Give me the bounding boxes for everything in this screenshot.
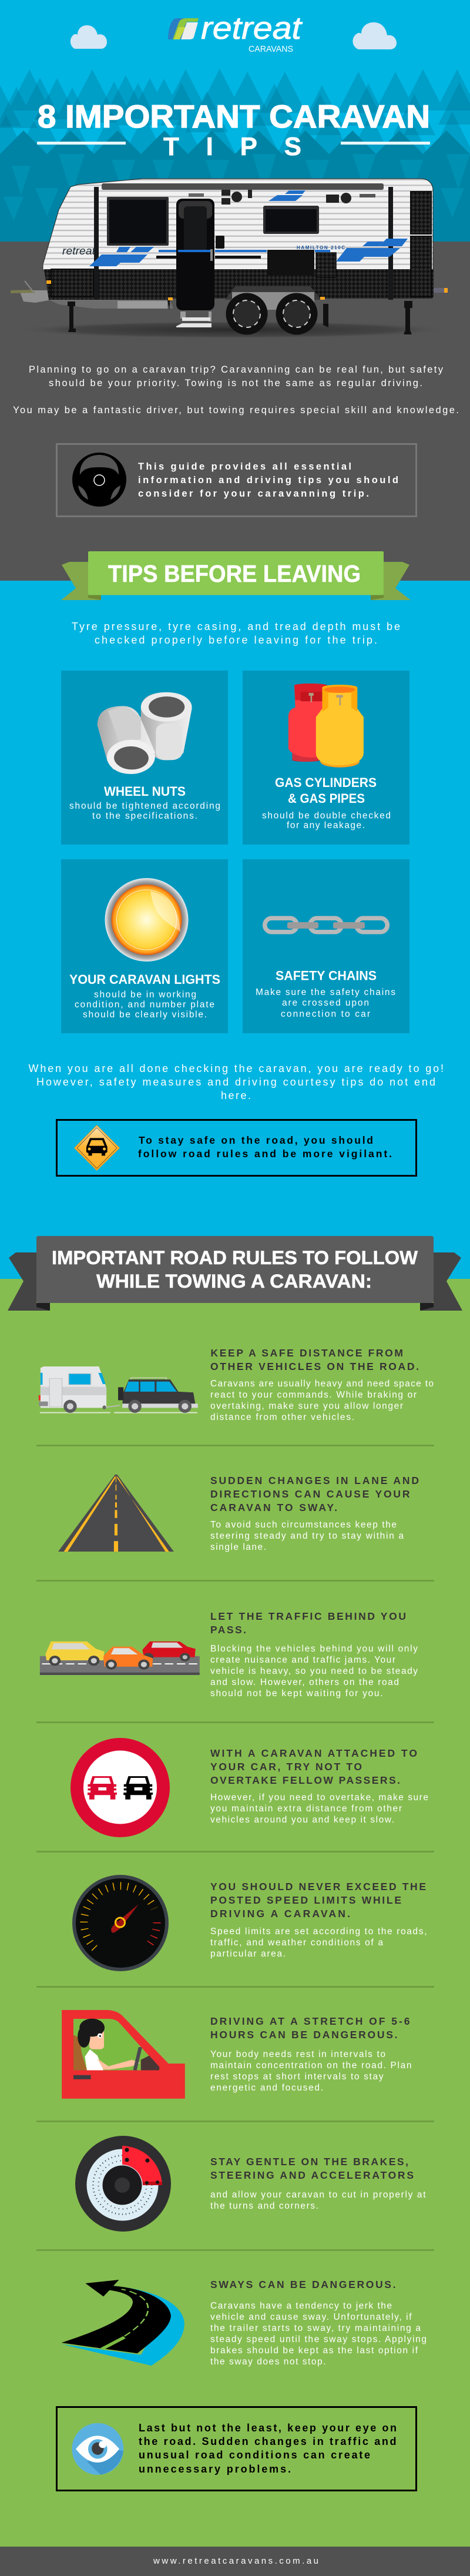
rule heading (210, 1881, 426, 1920)
icon: no overtaking sign (70, 1738, 170, 1837)
front locker (51, 269, 93, 297)
card text: should be in working (94, 990, 196, 1000)
icon: road (58, 1475, 174, 1552)
blue section background (0, 581, 470, 1279)
rule heading: DIRECTIONS CAN CAUSE YOUR (210, 1488, 410, 1500)
title (37, 98, 430, 161)
wheel arch (225, 286, 321, 300)
black trim stripes (156, 256, 261, 259)
ready to go text: here. (221, 1090, 251, 1101)
logo wordmark: retreat (201, 11, 303, 46)
rule heading (210, 1610, 406, 1636)
callout text: To stay safe on the road, you should (139, 1134, 373, 1146)
hatch large (267, 250, 314, 275)
rule 8: sways (62, 2279, 427, 2367)
rule heading (210, 1747, 417, 1786)
caravan lower panel (44, 269, 434, 310)
ready to go text (28, 1063, 444, 1101)
rule heading (210, 1347, 419, 1372)
heading text: WHILE TOWING A CARAVAN: (96, 1271, 372, 1292)
rule text: and allow your caravan to cut in properly at (210, 2190, 426, 2200)
card text: connection to car (281, 1009, 370, 1019)
footer background (0, 2547, 470, 2576)
heading text: TIPS BEFORE LEAVING (108, 560, 361, 587)
heading ribbon: tips before leaving (61, 551, 411, 600)
card title: & GAS PIPES (288, 791, 365, 806)
icon: eye (72, 2423, 123, 2475)
rule text (210, 2049, 411, 2093)
rule text (210, 1520, 404, 1552)
rule heading: OVERTAKE FELLOW PASSERS. (210, 1774, 400, 1786)
rule text: vehicle is heavy, so you need to be steady (210, 1666, 418, 1676)
rule heading: DRIVING AT A STRETCH OF 5-6 (210, 2015, 410, 2027)
step (176, 311, 212, 327)
callout text: consider for your caravanning trip. (138, 488, 369, 499)
rule 5: speed limits (72, 1875, 427, 1971)
rule heading: KEEP A SAFE DISTANCE FROM (210, 1347, 403, 1359)
speakers and vents (189, 190, 375, 205)
card text: should be clearly visible. (83, 1010, 207, 1020)
rule text: traffic, and weather conditions of a (210, 1938, 383, 1948)
heading text: IMPORTANT ROAD RULES TO FOLLOW (52, 1247, 418, 1268)
rule text: steady speed until the sway stops. Applying (210, 2334, 427, 2344)
card text: Make sure the safety chains (256, 987, 395, 997)
rule text: should not be kept waiting for you. (210, 1689, 383, 1699)
tail light (46, 280, 448, 300)
rule text: However, if you need to overtake, make sure (210, 1793, 428, 1803)
rule text: maintain concentration on the road. Plan (210, 2061, 411, 2071)
rule heading: LET THE TRAFFIC BEHIND YOU (210, 1610, 406, 1622)
card text: for any leakage. (287, 820, 365, 830)
rule text: vehicle and cause sway. Unfortunately, if (210, 2312, 412, 2322)
logo: retreat caravans (168, 11, 303, 54)
door handle box (216, 236, 224, 249)
icon: curving road arrow (62, 2280, 184, 2366)
rule text (210, 1379, 434, 1422)
rule text: Caravans have a tendency to jerk the (210, 2301, 392, 2311)
callout text: Last but not the least, keep your eye on (139, 2422, 397, 2434)
rule heading: SUDDEN CHANGES IN LANE AND (210, 1475, 419, 1486)
rule heading: SWAYS CAN BE DANGEROUS. (210, 2279, 396, 2290)
icon: car warning sign (75, 1125, 119, 1170)
rule heading: POSTED SPEED LIMITS WHILE (210, 1894, 401, 1906)
rule text: the turns and corners. (210, 2201, 318, 2211)
suspension (232, 292, 314, 310)
rule text (210, 1927, 427, 1959)
card text: should be double checked (262, 811, 391, 820)
heading ribbon: important road rules (8, 1236, 462, 1311)
rule 1: safe distance (39, 1347, 434, 1422)
rule text: single lane. (210, 1542, 266, 1552)
title line 1: 8 IMPORTANT CARAVAN (38, 98, 430, 135)
callout text: unusual road conditions can create (139, 2449, 370, 2461)
callout: road rules (56, 1120, 416, 1175)
rule 2: sudden lane changes (58, 1475, 419, 1552)
wheels (226, 293, 317, 335)
road shadow (15, 321, 452, 339)
rule text (210, 1793, 428, 1825)
card text: to the specifications. (92, 811, 197, 821)
callout text (138, 1134, 392, 1160)
rule text: steering steady and try to stay within a (210, 1531, 404, 1541)
rule text: Blocking the vehicles behind you will only (210, 1644, 418, 1654)
icon: wheel nuts (98, 692, 192, 779)
rule 4: do not overtake (70, 1738, 428, 1837)
jacks (68, 301, 412, 334)
callout text: This guide provides all essential (138, 461, 351, 472)
rule text: Your body needs rest in intervals to (210, 2049, 385, 2059)
card title: GAS CYLINDERS (275, 775, 377, 790)
card title: SAFETY CHAINS (276, 969, 377, 983)
icon: lamp (105, 878, 188, 962)
rule heading: CARAVAN TO SWAY. (210, 1502, 337, 1513)
rule text: you maintain extra distance from other (210, 1804, 402, 1814)
card title: YOUR CARAVAN LIGHTS (69, 972, 220, 987)
icon: brake disc (75, 2136, 171, 2232)
hatch small (316, 253, 336, 277)
icon: caravan towed by car (39, 1366, 198, 1413)
rule heading: HOURS CAN BE DANGEROUS. (210, 2029, 397, 2041)
panel: caravan lights (61, 859, 228, 1033)
rule text: Caravans are usually heavy and need space to (210, 1379, 434, 1389)
rule heading: STEERING AND ACCELERATORS (210, 2169, 414, 2181)
ready to go text: However, safety measures and driving courtesy tips do not end (36, 1076, 435, 1088)
card text (69, 801, 220, 821)
rule heading: WITH A CARAVAN ATTACHED TO (210, 1747, 417, 1759)
window rear (263, 206, 319, 234)
rule text: vehicles around you and keep it slow. (210, 1815, 394, 1825)
rule heading: YOUR CAR, TRY NOT TO (210, 1761, 362, 1773)
rule heading: YOU SHOULD NEVER EXCEED THE (210, 1881, 426, 1892)
rule text: the trailer starts to sway, try maintaining a (210, 2323, 421, 2333)
rear locker panels (411, 192, 431, 297)
caravan model lettering: HAMILTON 210C (297, 245, 345, 250)
caravan illustration (11, 179, 448, 335)
card text: condition, and number plate (75, 1000, 214, 1010)
icon: cars on road (40, 1642, 200, 1675)
rule text (210, 1644, 418, 1699)
icon: gas cylinders (288, 684, 364, 768)
heading text (52, 1247, 418, 1292)
rule heading: OTHER VEHICLES ON THE ROAD. (210, 1361, 419, 1372)
intro text (13, 364, 459, 416)
blue decals (89, 190, 408, 266)
panel: gas cylinders (243, 671, 409, 845)
callout text (138, 461, 398, 499)
footer url: www.retreatcaravans.com.au (153, 2556, 318, 2566)
rule heading: PASS. (210, 1624, 246, 1636)
chassis (49, 300, 173, 309)
awning poles (94, 187, 393, 300)
panel: wheel nuts (61, 671, 228, 845)
card text (75, 990, 214, 1020)
tow hitch (11, 281, 49, 303)
callout text: the road. Sudden changes in traffic and (139, 2436, 396, 2447)
callout text (139, 2422, 397, 2475)
rule text: distance from other vehicles. (210, 1412, 354, 1422)
road grey background (0, 242, 470, 581)
rule heading: DRIVING A CARAVAN. (210, 1908, 350, 1920)
rule text: To avoid such circumstances keep the (210, 1520, 397, 1530)
rule heading: STAY GENTLE ON THE BRAKES, (210, 2156, 408, 2168)
icon: driver in car (62, 2010, 185, 2099)
cloud left (70, 25, 107, 49)
card text: should be tightened according (69, 801, 220, 811)
awning (102, 183, 384, 190)
caravan body (43, 179, 433, 270)
intro text: should be your priority. Towing is not the same as regular driving. (49, 378, 422, 388)
callout text: follow road rules and be more vigilant. (138, 1148, 392, 1160)
icon: speedometer (72, 1875, 169, 1971)
window front (107, 197, 169, 246)
callout text: unnecessary problems. (139, 2463, 291, 2475)
rule text: particular area. (210, 1949, 286, 1959)
card text (256, 987, 395, 1019)
rule text (210, 2301, 427, 2367)
sky background (0, 0, 470, 242)
icon: chain (265, 918, 387, 932)
rule text (210, 2190, 426, 2211)
rule text: the sway does not stop. (210, 2357, 325, 2367)
forest of trees (0, 69, 470, 242)
rule text: overtaking, make sure you allow longer (210, 1401, 403, 1411)
card title: WHEEL NUTS (104, 784, 186, 799)
tyre text (72, 621, 400, 646)
callout text: information and driving tips you should (138, 475, 398, 485)
rule text: rest stops at short intervals to stay (210, 2072, 384, 2082)
rule 3: let traffic pass (40, 1610, 418, 1699)
card text: are crossed upon (282, 998, 369, 1008)
door (176, 199, 214, 310)
panel: safety chains (243, 859, 409, 1033)
logo mark (168, 18, 199, 39)
rule text: energetic and focused. (210, 2083, 323, 2093)
callout: keep your eye on the road (56, 2407, 416, 2491)
intro text: You may be a fantastic driver, but towing requires special skill and knowledge. (13, 405, 459, 416)
rule 7: gentle on the brakes (75, 2136, 426, 2232)
rule heading (210, 2015, 410, 2041)
rule 6: long stretches (62, 2010, 411, 2099)
green section background (0, 1279, 470, 2547)
rule text: and slow. However, others on the road (210, 1677, 399, 1687)
rule text: react to your commands. While braking or (210, 1390, 417, 1400)
caravan retreat lettering: retreat (62, 245, 96, 257)
tyre text: checked properly before leaving for the trip. (95, 634, 377, 646)
logo subtitle: CARAVANS (249, 44, 293, 54)
intro text: Planning to go on a caravan trip? Caravanning can be real fun, but safety (29, 364, 444, 375)
rule heading (210, 1475, 419, 1513)
card title (275, 775, 377, 806)
icon: steering wheel (72, 453, 126, 507)
callout: guide (56, 444, 416, 516)
rule heading (210, 2156, 414, 2181)
cloud right (352, 22, 397, 49)
title word TIPS: TIPS (163, 132, 301, 161)
rule text: Speed limits are set according to the roads, (210, 1927, 427, 1937)
rule text: create nuisance and traffic jams. Your (210, 1655, 395, 1665)
tyre text: Tyre pressure, tyre casing, and tread depth must be (72, 621, 400, 632)
ready to go text: When you are all done checking the caravan, you are ready to go! (28, 1063, 444, 1074)
rule text: brakes should be kept as the last option if (210, 2346, 418, 2356)
card text (262, 811, 391, 830)
